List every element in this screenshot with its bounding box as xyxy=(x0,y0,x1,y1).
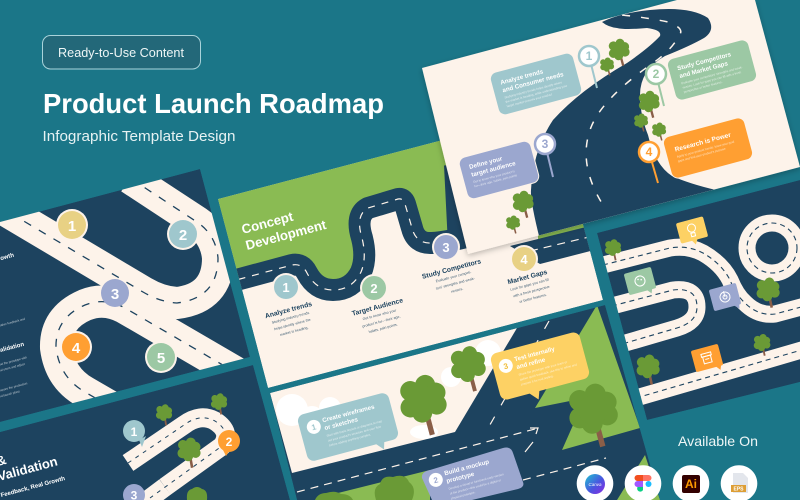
step 2 xyxy=(352,274,403,333)
icon: Canva xyxy=(577,465,613,500)
marker 2 xyxy=(218,430,240,456)
icon: Adobe Illustrator: Ai xyxy=(685,477,697,491)
step 4: Look for gaps you can fill xyxy=(510,278,549,292)
pin 2 xyxy=(646,64,666,106)
trees xyxy=(154,392,229,500)
green hill bottom right xyxy=(617,455,660,500)
marker 3 xyxy=(123,484,145,500)
heading: Concept xyxy=(240,209,295,237)
icon sign: archive xyxy=(691,344,724,376)
card 2: of the product—this could be a digital or xyxy=(449,478,501,496)
road: hairpin xyxy=(128,418,226,500)
step 3 xyxy=(422,233,481,293)
sky area xyxy=(270,328,517,473)
card 1: 1 xyxy=(311,422,318,432)
pin 3: 3 xyxy=(542,137,549,151)
card 1: before adding anything complex. xyxy=(329,432,372,447)
icon: Canva: Canva xyxy=(588,482,602,487)
step 3: Evaluate your competi- xyxy=(435,270,473,283)
card 3: 3 xyxy=(503,361,510,371)
card: study competitors: perspective or better features. xyxy=(683,80,723,94)
marker 1 xyxy=(56,209,88,241)
card: analyze trends: Analyze trends xyxy=(500,68,545,87)
marker 2: 2 xyxy=(179,227,187,244)
card: analyze trends xyxy=(489,52,583,116)
step 3: nesses. xyxy=(451,287,464,294)
card 3: gather quick feedback, use this to refine and xyxy=(519,362,578,382)
card 3: prepare it for real testing. xyxy=(521,374,554,386)
road: middle hairpin xyxy=(612,290,697,344)
step 1 xyxy=(266,273,312,336)
title: Product Launch Roadmap xyxy=(43,88,384,119)
road: bottom xyxy=(636,349,800,398)
card: study competitors: and Market Gaps xyxy=(679,60,729,80)
card: analyze trends: Studying industry trends helps identify where xyxy=(504,80,563,100)
card: research is power xyxy=(662,116,754,180)
icon: EPS file: EPS xyxy=(733,486,744,492)
panel: validation slide bottom left xyxy=(0,365,290,500)
step 2: 2 xyxy=(370,281,378,296)
step 4: with a fresh perspective xyxy=(513,285,550,298)
step 1: helps identify where the xyxy=(274,318,311,331)
icon: EPS file xyxy=(721,465,757,500)
step 2: Get to know who your xyxy=(362,308,398,321)
card 2: 2 xyxy=(433,475,440,485)
badge: Ready-to-Use Content: Ready-to-Use Content xyxy=(58,45,184,60)
clouds xyxy=(276,340,501,439)
marker 3: 3 xyxy=(111,286,119,303)
marker 5: 5 xyxy=(157,350,165,367)
step 4: Market Gaps xyxy=(507,269,548,286)
step 3: 3 xyxy=(442,240,450,255)
card: analyze trends: target market ensures your product xyxy=(506,92,553,108)
badge: Ready-to-Use Content xyxy=(42,36,200,69)
card: research is power: gaps and find your product's purpose xyxy=(677,146,726,163)
card: define your target audience: Get to know who your product is xyxy=(473,169,516,184)
step 4: 4 xyxy=(520,252,528,267)
card: study competitors: nesses. Look for gaps you can fill with a fresh xyxy=(682,70,742,90)
panel: concept development slide xyxy=(218,140,603,388)
panel: research slide top right xyxy=(422,0,800,254)
road: upper curve xyxy=(0,178,218,303)
card 2: prototype xyxy=(446,471,476,485)
card: define your target audience: for—their age, habits, pain points xyxy=(474,173,518,188)
card 1: Start with basic layouts or diagrams to map xyxy=(326,419,383,438)
card: study competitors xyxy=(666,38,758,102)
road: ring xyxy=(747,223,797,273)
green hill bottom left xyxy=(338,470,430,500)
step 3: tors' strengths and weak- xyxy=(436,276,476,291)
road: winding road on research slide xyxy=(531,9,716,240)
marker 1: 1 xyxy=(68,218,76,235)
card 1: or sketches xyxy=(324,416,359,432)
icon sign: target xyxy=(709,283,742,315)
card: define your target audience: Define your xyxy=(468,155,504,171)
trees xyxy=(603,238,783,387)
label: Available On: Available On xyxy=(678,433,758,449)
road: lower curve xyxy=(56,302,240,418)
green strip under research slide xyxy=(538,224,584,239)
pin 4 xyxy=(639,142,659,183)
icon: Adobe Illustrator xyxy=(673,465,709,500)
card: research is power: Research is Power xyxy=(674,132,732,154)
card 3: Share the prototype with your team or xyxy=(518,360,568,377)
step 1: Studying industry trends xyxy=(271,311,310,325)
left text cut off xyxy=(0,253,28,399)
step 1: Analyze trends xyxy=(264,301,313,320)
road dashes xyxy=(297,321,606,492)
card 3: Test internally xyxy=(514,346,556,363)
card: research is power: Apply to your product trends, know your goal xyxy=(676,140,735,159)
panel: icon road slide right xyxy=(597,180,800,420)
card: define your target audience: target audience xyxy=(471,160,517,179)
marker 4 xyxy=(60,331,92,363)
green hill right xyxy=(535,305,640,450)
marker 1: 1 xyxy=(131,425,138,439)
marker 5 xyxy=(145,341,177,373)
road xyxy=(225,165,606,290)
card 2 xyxy=(422,448,523,500)
panel: road slide left xyxy=(0,169,250,422)
icon: Figma xyxy=(625,465,661,500)
step 2: product is for—their age, xyxy=(362,315,401,329)
card: study competitors: Evaluate your competitors' strengths and weak- xyxy=(681,65,743,85)
trees xyxy=(315,343,627,500)
pin 1: 1 xyxy=(586,49,593,63)
pin 1 xyxy=(579,46,599,88)
step 3: Study Competitors xyxy=(421,258,482,281)
step 1: 1 xyxy=(282,280,290,295)
icon sign: idea xyxy=(676,216,709,248)
marker 2: 2 xyxy=(226,435,233,449)
panel: prototype slide bottom centre xyxy=(270,305,660,500)
green header area xyxy=(218,140,448,279)
step 4 xyxy=(508,245,550,303)
marker 2 xyxy=(167,220,197,250)
road: top xyxy=(603,247,800,314)
marker 4: 4 xyxy=(72,340,81,357)
heading xyxy=(0,456,65,497)
pin 4: 4 xyxy=(646,145,653,159)
pin 3 xyxy=(535,134,555,177)
card: study competitors: Study Competitors xyxy=(677,51,732,72)
card 3: and refine xyxy=(516,356,547,371)
step 1: market is heading. xyxy=(279,326,309,337)
card: analyze trends: the market is heading, while understanding your xyxy=(505,84,568,104)
step 2: Target Audience xyxy=(351,297,404,318)
trees on research slide xyxy=(504,37,669,235)
card 1 xyxy=(298,393,398,461)
card 2: Develop a visual or functional early version xyxy=(448,472,504,491)
card 3 xyxy=(490,332,590,400)
icon sign: palette xyxy=(624,267,657,299)
marker 1 xyxy=(123,420,146,447)
pin 2: 2 xyxy=(653,67,660,81)
marker 3 xyxy=(101,279,129,307)
subtitle: Infographic Template Design xyxy=(42,128,236,145)
step 4: or better features. xyxy=(519,293,547,304)
card 1: out your product's structure and user flow xyxy=(327,424,382,443)
card: analyze trends: and Consumer needs xyxy=(502,71,565,94)
heading: Development xyxy=(244,217,328,253)
card: define your target audience xyxy=(458,140,540,200)
card 1: Create wireframes xyxy=(322,403,376,424)
step 2: habits, pain points. xyxy=(368,323,398,334)
card 2: Build a mockup xyxy=(444,459,490,477)
